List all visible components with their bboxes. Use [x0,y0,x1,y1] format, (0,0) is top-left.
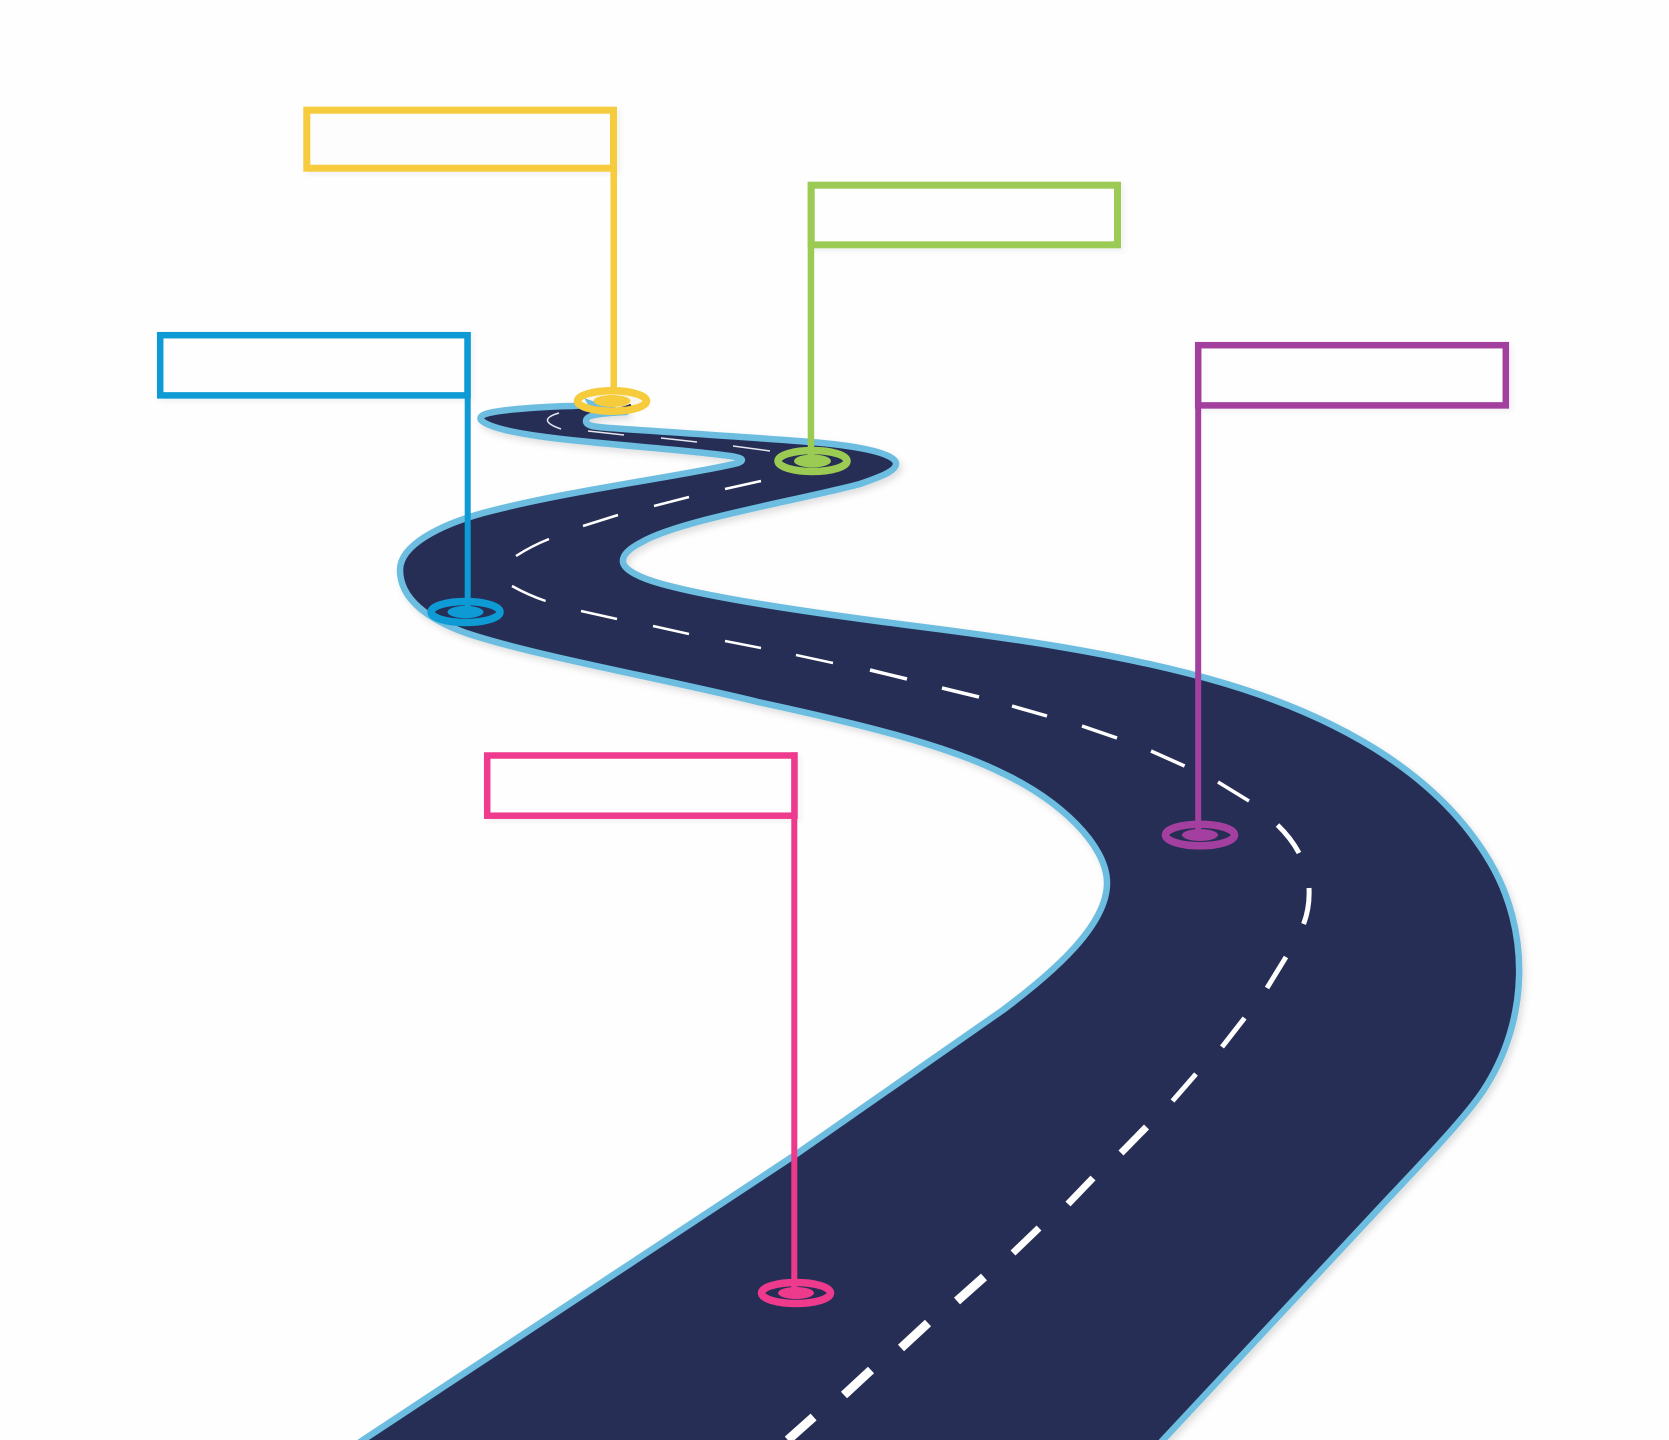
flag: purple milestone [1166,342,1506,846]
road centre dashes [512,413,1309,1440]
road [334,405,1519,1440]
green flag panel [811,185,1118,245]
purple pole [1195,342,1201,835]
pink flag panel [487,756,794,816]
flag: blue milestone [160,332,500,622]
purple ring marker [1166,824,1234,846]
green ring marker [778,450,847,472]
green pole [808,182,814,460]
pink ring marker [762,1282,830,1304]
blue pole [465,332,471,611]
flag: pink milestone [487,752,830,1304]
yellow ring marker [578,391,650,412]
yellow pole [610,107,617,400]
purple flag panel [1198,345,1506,405]
blue flag panel [160,335,467,395]
pink pole [791,752,797,1293]
flag: green milestone [778,182,1118,472]
flag: yellow milestone [307,107,650,412]
blue ring marker [431,602,500,622]
yellow flag panel [307,110,614,168]
